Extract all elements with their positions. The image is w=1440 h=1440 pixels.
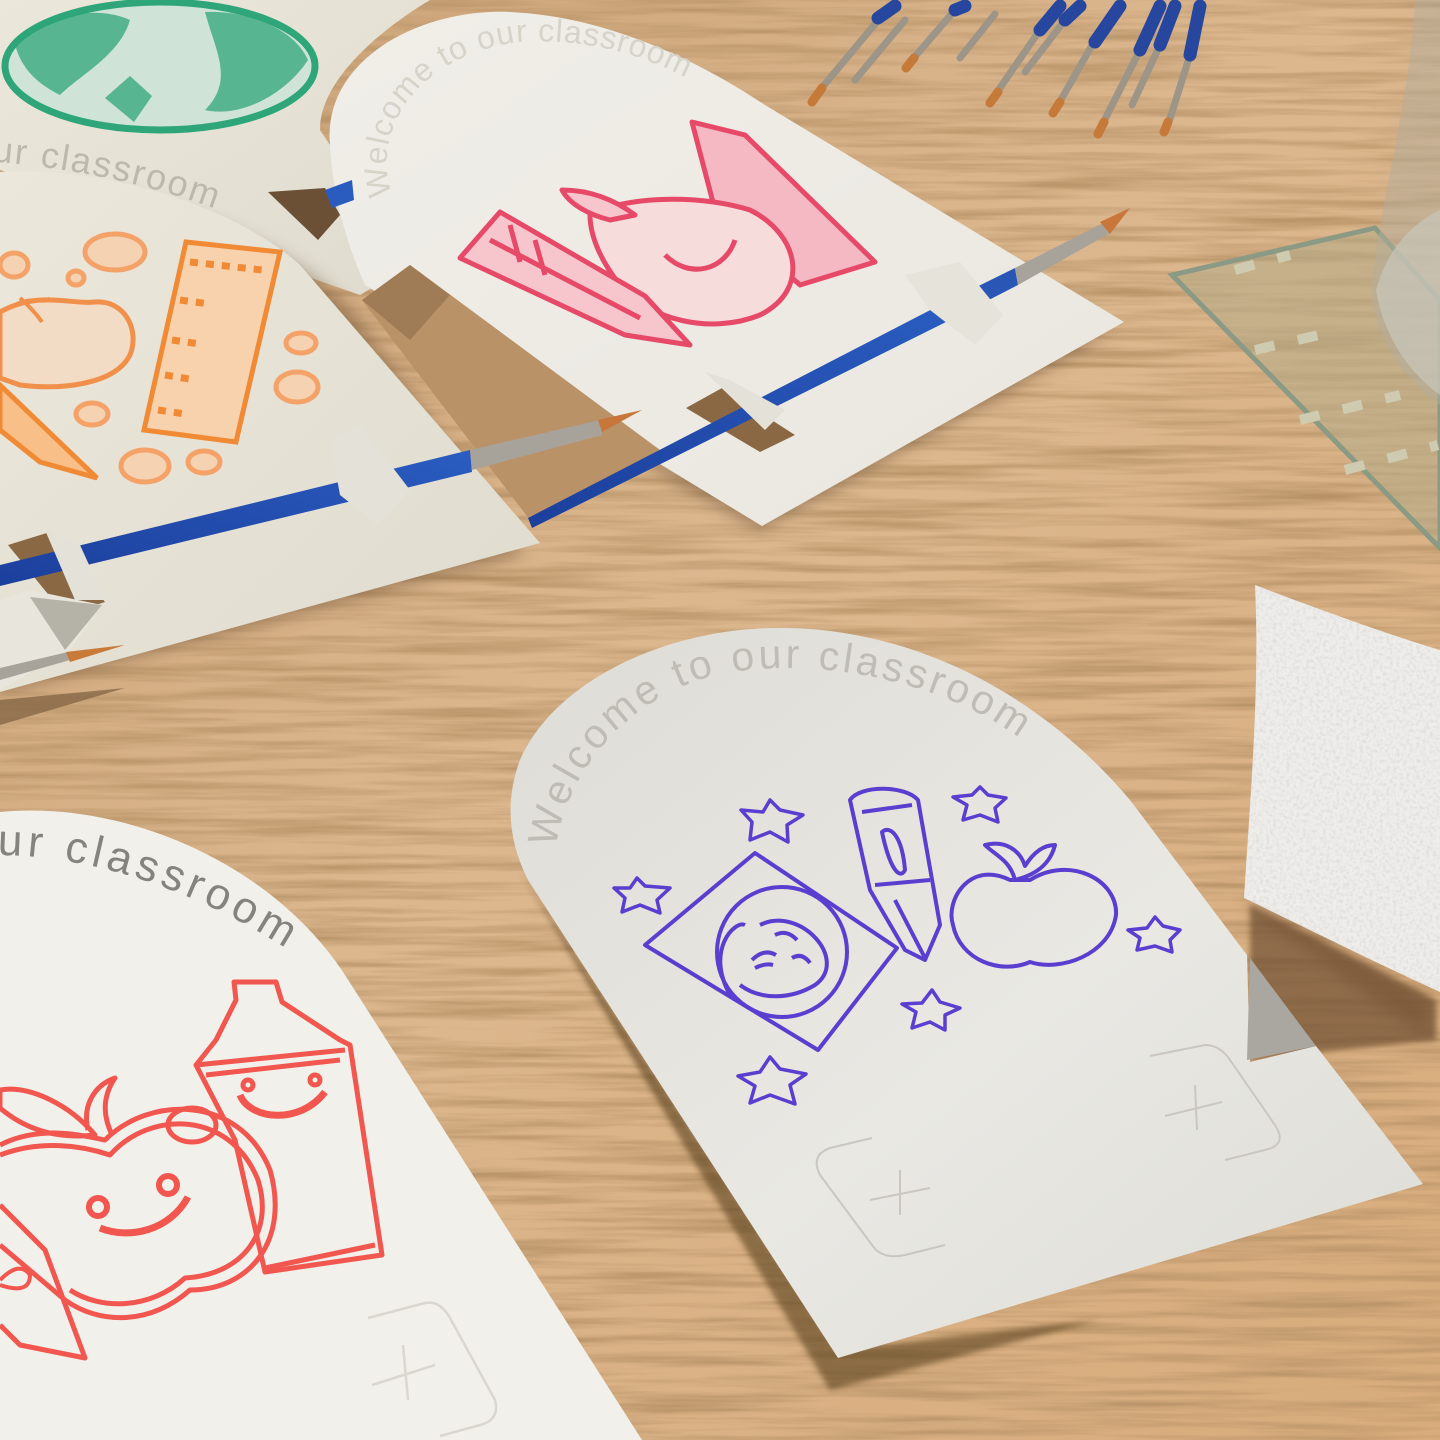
paint brush: long blue, centre [528, 208, 1130, 528]
card body [511, 628, 1423, 1358]
card: red apple and marker, bottom left [0, 810, 642, 1440]
torn gap [1247, 958, 1316, 1060]
card shadow [520, 870, 1100, 1390]
card: red stationery, top centre [330, 12, 1124, 536]
icon: purple book with smiley [645, 853, 897, 1050]
paper towel [1244, 585, 1440, 1040]
icon: purple crayon [850, 789, 940, 960]
icon: orange apple [0, 298, 133, 387]
icon: purple apple [952, 844, 1116, 967]
arched caption: Welcome to our classroom [528, 642, 1027, 841]
card: green globe, top left [0, 0, 430, 295]
paper tab [705, 372, 785, 430]
icon: red book, apple, pencil stamp [460, 122, 875, 345]
orange dots [0, 234, 318, 482]
icon: orange ruler [144, 242, 280, 442]
paper tab [45, 530, 105, 600]
icon: purple stars [614, 787, 1180, 1104]
arched caption: Welcome to our classroom [364, 18, 690, 199]
icon: red marker bottle [196, 982, 382, 1272]
paper tab [330, 425, 410, 525]
blue paint brushes, top right [812, 6, 1200, 134]
blue brush fragment behind cards [325, 180, 354, 208]
paint brush: long blue, left [0, 410, 642, 600]
lower-left torn card strip [0, 590, 125, 725]
icon: green globe stamp [5, 2, 315, 130]
slot between cards [362, 265, 660, 520]
debossed slot outlines [817, 1045, 1280, 1256]
small paint brush [0, 645, 125, 680]
drinking glass, top right [1372, 0, 1440, 405]
icon: red apple [0, 1078, 275, 1318]
card cutout slot [8, 532, 105, 615]
card: purple stationery, centre [510, 628, 1440, 1392]
icon: red pencil [0, 1205, 85, 1358]
paper tab [905, 262, 1003, 345]
glass ruler, right [1172, 228, 1440, 548]
card cutout slot [686, 388, 795, 452]
debossed slot outline [368, 1303, 496, 1436]
card: orange stationery, left [0, 144, 540, 698]
icon: orange pencil [0, 385, 97, 478]
